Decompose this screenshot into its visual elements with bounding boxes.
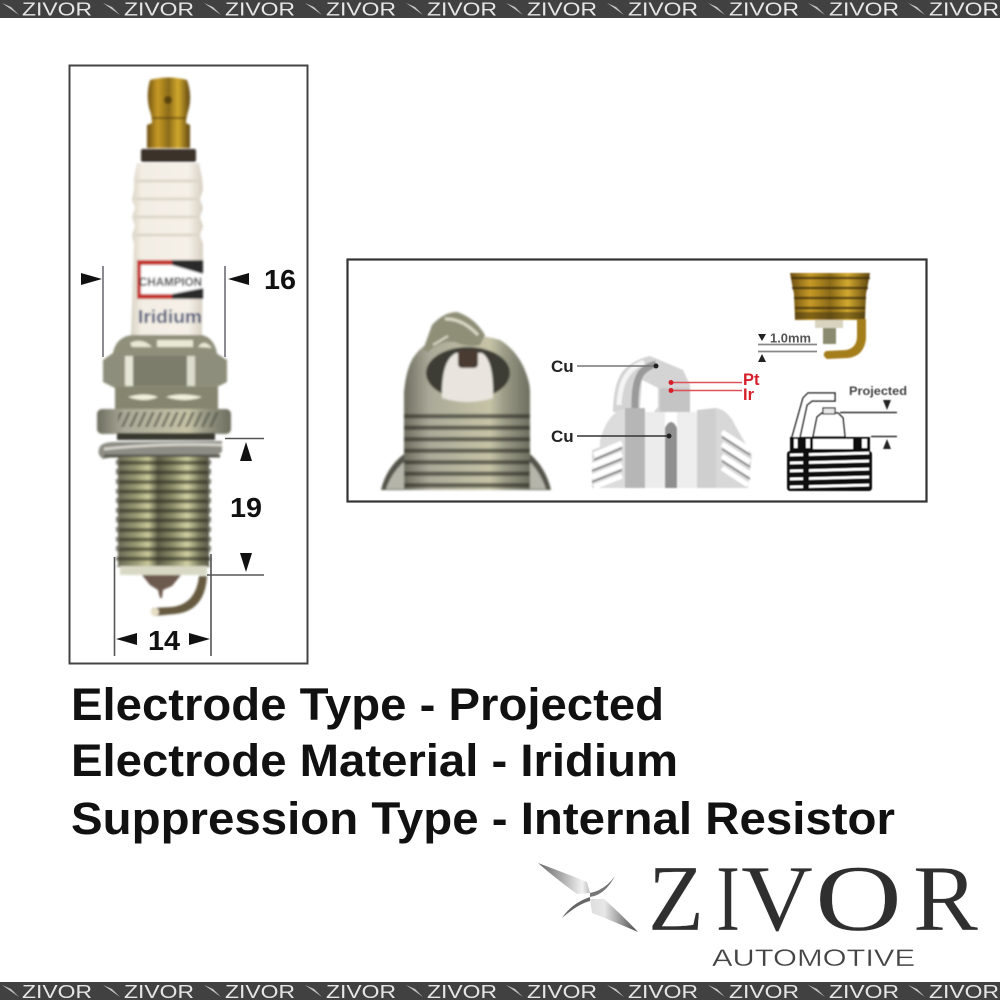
hex nut (103, 335, 227, 409)
label: Cu upper: Cu (551, 357, 574, 376)
top brand strip: ZIVOR (729, 0, 799, 20)
line: suppression type: Suppression Type - Internal Resistor (71, 793, 895, 844)
top brand strip: ZIVOR (427, 0, 497, 20)
specification text (71, 679, 895, 844)
label: Cu lower: Cu (551, 427, 574, 446)
photo: brass plug with 1.0mm gap (790, 273, 870, 359)
diagram: copper core cross-section (592, 356, 752, 488)
bottom brand strip (0, 982, 1000, 1000)
label: Cu upper (551, 357, 658, 376)
label: 1.0mm gap: 1.0mm (770, 332, 811, 346)
top brand strip: ZIVOR (225, 0, 295, 20)
ground electrode (613, 356, 690, 412)
spark plug photo (97, 78, 231, 616)
wordmark: V (741, 847, 813, 951)
label: Ir (668, 386, 755, 404)
champion logo: CHAMPION (139, 275, 202, 289)
wordmark: O (815, 847, 902, 951)
fins (592, 408, 625, 488)
dimension: 19 (207, 438, 264, 575)
dimension: 19: 19 (230, 492, 262, 523)
spark plug photo: Iridium (138, 307, 202, 327)
top brand strip: ZIVOR (628, 0, 698, 20)
photo: electrode close-up (381, 312, 551, 490)
label: 1.0mm gap (758, 332, 817, 362)
dimension: 14 (114, 554, 211, 656)
wordmark: I (716, 847, 740, 951)
label: Ir: Ir (743, 386, 755, 404)
label: Projected: Projected (849, 386, 907, 398)
dimension: 16: 16 (264, 264, 296, 295)
label: Pt: Pt (743, 371, 760, 389)
icon: swoosh X (538, 863, 638, 932)
dimension: 14: 14 (148, 625, 180, 656)
panel: electrode detail (348, 260, 926, 502)
top brand strip: ZIVOR (124, 0, 194, 20)
dimension: 16 (81, 264, 296, 357)
label: Cu lower (551, 427, 672, 446)
line: electrode type: Electrode Type - Projected (71, 679, 664, 730)
top brand strip: ZIVOR (22, 0, 92, 20)
top brand strip: ZIVOR (929, 0, 999, 20)
top brand strip: ZIVOR (326, 0, 396, 20)
top brand strip: ZIVOR (829, 0, 899, 20)
top brand strip (0, 0, 1000, 20)
label: Pt (668, 371, 760, 389)
tagline: AUTOMOTIVE (712, 945, 915, 972)
wordmark: R (913, 847, 978, 951)
diagram: projected electrode (787, 386, 907, 491)
line: electrode material: Electrode Material - Iridium (71, 735, 678, 786)
logo: Zivor Automotive (538, 847, 978, 972)
top brand strip: ZIVOR (527, 0, 597, 20)
panel: spark plug dimensions (70, 66, 308, 664)
wordmark (648, 847, 978, 951)
body (623, 408, 645, 488)
wordmark: Z (648, 847, 704, 951)
champion logo (137, 260, 203, 299)
